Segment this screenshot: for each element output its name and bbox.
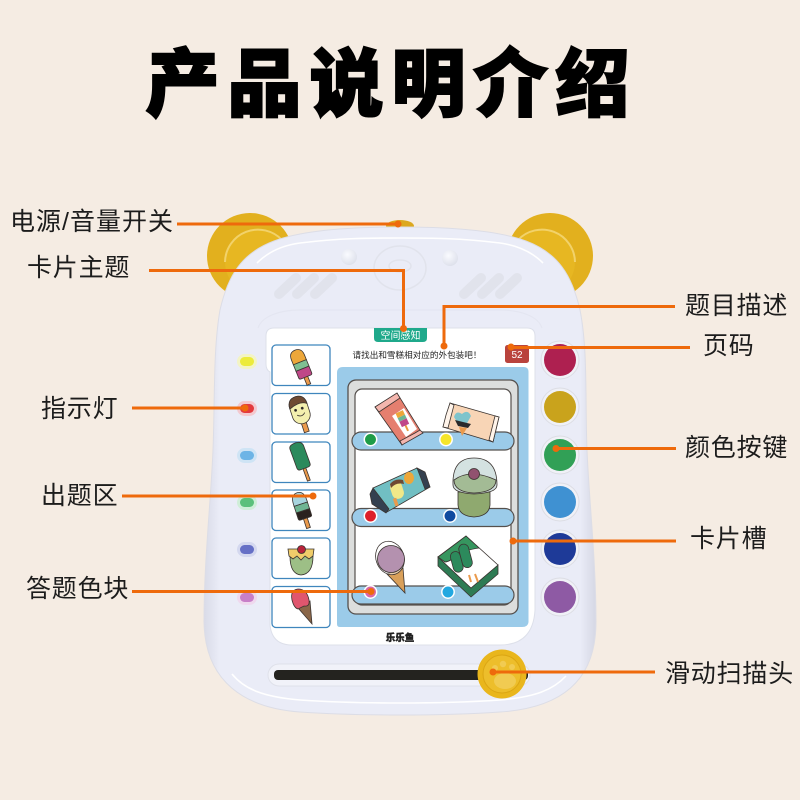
left ear <box>207 213 293 299</box>
label: power and volume switch <box>10 208 402 236</box>
answer panel <box>337 367 528 627</box>
label: question description: 题目描述 <box>685 292 788 320</box>
right ear <box>507 213 593 299</box>
label: card slot <box>510 525 767 553</box>
scan track <box>268 664 530 686</box>
icon: pink ice cream cone <box>292 589 312 624</box>
package: domed cup <box>453 458 497 517</box>
question cards <box>272 345 330 628</box>
device <box>204 213 596 715</box>
power button <box>386 220 414 232</box>
icon: tricolour popsicle <box>289 348 315 387</box>
label: question area: 出题区 <box>41 482 118 510</box>
card theme badge: 空间感知 <box>380 329 420 342</box>
inner bevel <box>258 310 542 328</box>
bear emblem <box>374 246 426 290</box>
package: tricolour popsicle wrapper <box>375 393 423 445</box>
label: card slot: 卡片槽 <box>690 525 767 553</box>
speaker slots right <box>464 278 517 294</box>
label: colour keys <box>552 434 788 462</box>
package: peach wrapper <box>443 403 499 442</box>
package: green box <box>438 536 498 597</box>
icon: green popsicle <box>289 441 315 483</box>
page number: 52 <box>511 350 523 361</box>
label: page number: 页码 <box>703 332 755 360</box>
speaker slots left <box>279 278 332 294</box>
brand logo: 乐乐鱼 <box>386 632 415 644</box>
label: indicator light <box>41 395 248 423</box>
icon: cherry cup <box>288 546 314 575</box>
label: page number <box>508 332 755 360</box>
package: teal wrapper <box>370 468 430 513</box>
package: purple ice cream cone <box>371 537 409 593</box>
card sheet <box>266 328 535 645</box>
shelf frame <box>348 380 518 614</box>
small dome right <box>442 250 458 266</box>
icon: blue green black popsicle <box>290 491 315 530</box>
label: question area <box>41 482 316 510</box>
label: sliding scan head <box>490 660 794 688</box>
label: indicator light: 指示灯 <box>41 395 118 423</box>
title: 产品说明介绍 <box>146 43 638 126</box>
label: answer colour blocks <box>26 575 374 603</box>
label: card theme <box>27 254 407 332</box>
shelves <box>352 432 514 604</box>
colour buttons <box>541 341 579 616</box>
label: power and volume switch: 电源/音量开关 <box>10 208 174 236</box>
label: colour keys: 颜色按键 <box>685 434 788 462</box>
label: sliding scan head: 滑动扫描头 <box>665 660 794 688</box>
label: card theme: 卡片主题 <box>27 254 130 282</box>
label: question description <box>440 292 788 350</box>
answer colour dots <box>364 433 456 598</box>
scanner head <box>478 650 526 698</box>
label: answer colour blocks: 答题色块 <box>26 575 129 603</box>
page number <box>505 345 529 363</box>
question text: 请找出和雪糕相对应的外包装吧！ <box>353 349 481 360</box>
small dome left <box>341 249 357 265</box>
icon: face popsicle <box>287 394 315 435</box>
indicator lights <box>237 354 257 605</box>
device body <box>204 227 596 715</box>
card theme badge <box>374 328 427 342</box>
